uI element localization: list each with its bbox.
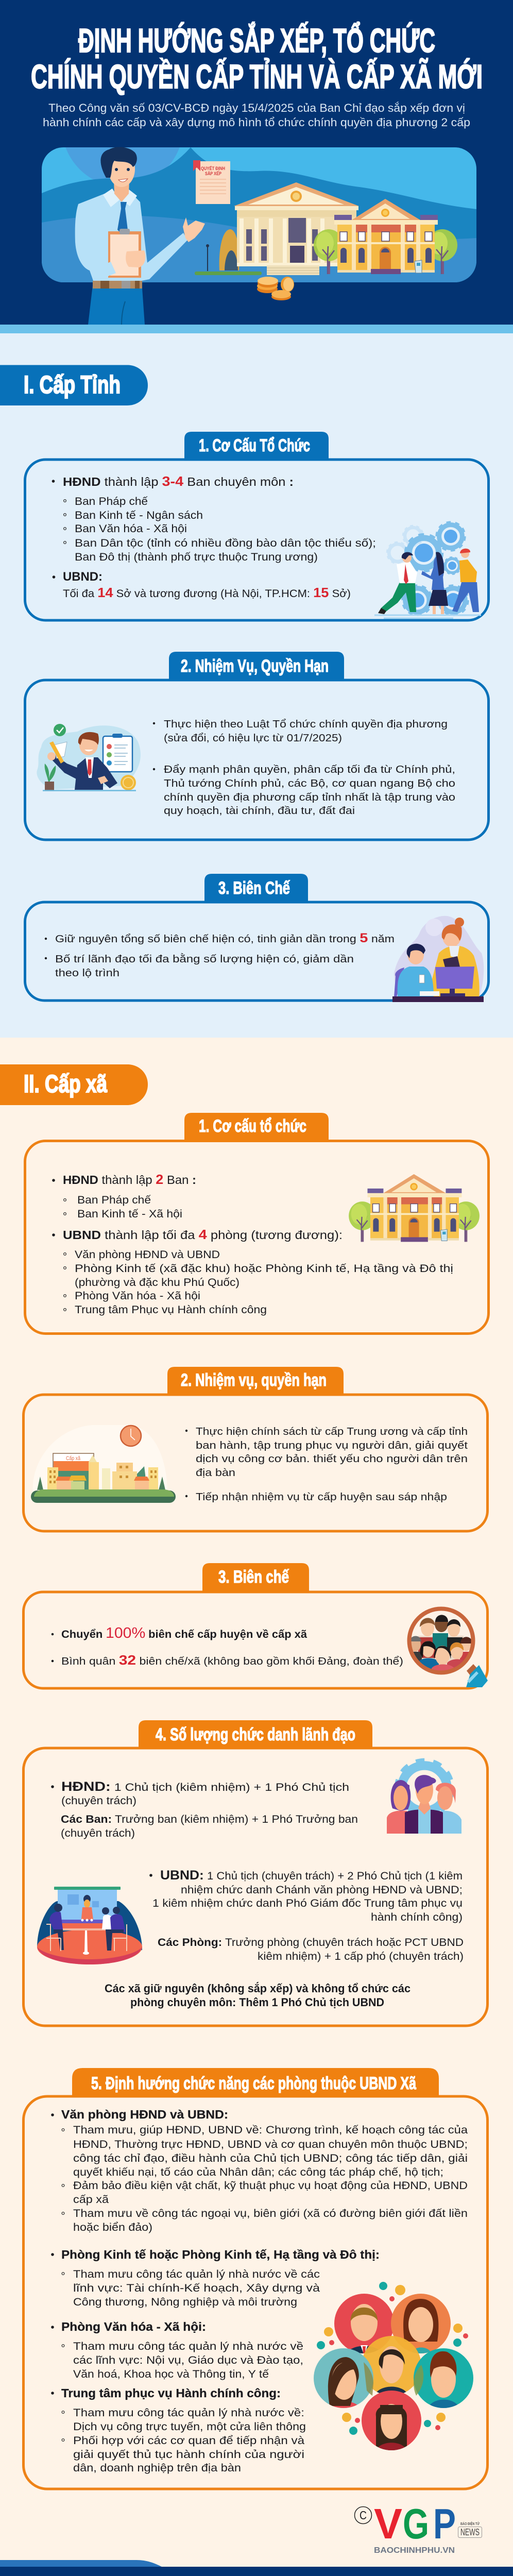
icon: man with clipboard bbox=[75, 147, 205, 325]
text block: chính quyền địa phương cấp tỉnh nhất là tập trung vào bbox=[164, 792, 455, 803]
text block: HĐND bbox=[51, 1780, 358, 1839]
text block: UBND: kiêm nhiệm) + 1 cấp phó (chuyên trách) bbox=[258, 1951, 464, 1962]
text block: (sửa đổi, có hiệu lực từ 01/7/2025) bbox=[164, 733, 342, 744]
text block: UBND: bbox=[63, 570, 102, 584]
tab heading: 3. Biên chế bbox=[218, 1567, 289, 1587]
text block: Đẩy mạnh phân quyền, phân cấp tối đa từ Chính phủ, bbox=[164, 764, 455, 775]
text block bbox=[185, 1426, 468, 1503]
icon: document: QUYẾT ĐỊNH bbox=[201, 166, 225, 171]
icon: people turning gears bbox=[374, 522, 481, 618]
text block: địa bàn bbox=[196, 1467, 235, 1479]
section heading: I. Cấp Tỉnh bbox=[0, 365, 148, 405]
text block: UBND: UBND: 1 Chủ tịch (chuyên trách) + 2 Phó Chủ tịch (1 kiêm bbox=[160, 1868, 463, 1883]
tab heading bbox=[184, 432, 329, 460]
text block: UBND: 1 kiêm nhiệm chức danh Phó Giám đốc Trung tâm phục vụ bbox=[152, 1897, 463, 1909]
panel: 5. Định hướng chức năng các phòng thuộc UBND Xã bbox=[24, 2068, 487, 2489]
text block: UBND bbox=[149, 1868, 464, 1962]
subtitle: hành chính các cấp và xây dựng mô hình tổ chức chính quyền địa phương 2 cấp bbox=[43, 116, 470, 129]
logo: VGP News: P bbox=[433, 2500, 456, 2548]
text block: Văn phòng HĐND và UBND: HĐND, Thường trực HĐND, UBND và cơ quan chuyên môn thuộc UBND; bbox=[73, 2139, 468, 2150]
text block: Tiếp nhận nhiệm vụ từ cấp huyện sau sáp nhập bbox=[196, 1492, 447, 1503]
text block: (phường và đặc khu Phú Quốc) bbox=[75, 1277, 240, 1289]
text block bbox=[52, 1625, 403, 1668]
text block: HĐND: Các Ban: Trưởng ban (kiêm nhiệm) + 1 Phó Trưởng ban bbox=[61, 1814, 358, 1825]
icon: two office workers at a computer bbox=[392, 916, 484, 1002]
text block: Phòng Kinh tế: Tham mưu công tác quản lý nhà nước về các bbox=[73, 2268, 320, 2280]
text block: Thủ tướng Chính phủ, các Bộ, cơ quan ngang Bộ cho bbox=[164, 778, 455, 789]
text block: Trung tâm Phục vụ Hành chính công bbox=[75, 1304, 267, 1316]
text block: Ban Kinh tế - Xã hội bbox=[77, 1208, 182, 1220]
text block: UBND: hành chính công) bbox=[371, 1911, 463, 1923]
logo: VGP News: NEWS bbox=[460, 2527, 480, 2537]
text block: HĐND: HĐND: 1 Chủ tịch (kiêm nhiệm) + 1 Phó Chủ tịch bbox=[61, 1780, 349, 1794]
text block: Thực hiện chính sách từ cấp Trung ương và cấp tỉnh bbox=[196, 1426, 468, 1437]
text block: Trung tâm phục vụ Hành chính công: giải quyết thủ tục hành chính của người bbox=[73, 2449, 304, 2461]
title bbox=[31, 22, 483, 95]
icon: circles of people bbox=[314, 2282, 473, 2452]
text block: Trung tâm phục vụ Hành chính công bbox=[51, 2386, 306, 2474]
text block: Văn phòng HĐND và UBND bbox=[75, 1249, 220, 1261]
panel: 3. Biên chế (tỉnh) bbox=[25, 874, 488, 1002]
icon: document bbox=[193, 160, 230, 204]
logo: VGP News: BAOCHINHPHU.VN bbox=[374, 2546, 455, 2555]
icon: building with trees bbox=[349, 1174, 480, 1242]
logo: VGP News: BÁO ĐIỆN TỬ bbox=[460, 2521, 480, 2526]
tab heading bbox=[184, 1113, 329, 1142]
text block: Văn phòng HĐND và UBND: công tác chỉ đạo, điều hành của Chủ tịch UBND; công tác tiếp dân, giải bbox=[73, 2153, 468, 2164]
icon: large building bbox=[195, 182, 359, 275]
text block: Ban Văn hóa - Xã hội bbox=[75, 523, 187, 535]
text block: Văn phòng HĐND và UBND: Văn phòng HĐND và UBND: bbox=[61, 2108, 228, 2121]
panel: 4. Số lượng chức danh lãnh đạo bbox=[24, 1720, 487, 2026]
text block: Phòng Kinh tế (xã đặc khu) hoặc Phòng Kinh tế, Hạ tầng và Đô thị bbox=[75, 1263, 453, 1275]
text block: note: Các xã giữ nguyên (không sắp xếp) và không tổ chức các bbox=[105, 1982, 411, 1995]
icon: document: SẮP XẾP bbox=[205, 171, 221, 176]
icon: town illustration: Cấp xã bbox=[66, 1455, 81, 1462]
text block: Chuyển 100% biên chế cấp huyện về cấp xã bbox=[61, 1625, 307, 1641]
text block: Trung tâm phục vụ Hành chính công: dân, doanh nghiệp trên địa bàn bbox=[73, 2462, 241, 2474]
text block: note bbox=[105, 1982, 411, 2009]
text block: Phòng Văn hóa - Xã hội: Văn hoá, Khoa học và Thông tin, Y tế bbox=[73, 2368, 269, 2380]
text block: Trung tâm phục vụ Hành chính công: Dịch vụ công trực tuyến, một cửa liên thông bbox=[73, 2421, 306, 2433]
icon: magnifier over people bbox=[409, 1608, 488, 1687]
tab heading bbox=[204, 874, 308, 902]
text block: Phòng Văn hóa - Xã hội: các lĩnh vực: Nội vụ, Giáo dục và Đào tạo, bbox=[73, 2354, 303, 2366]
text block: Ban Pháp chế bbox=[75, 496, 148, 507]
logo: VGP News: V bbox=[374, 2500, 402, 2548]
text block: Phòng Văn hóa - Xã hội: Tham mưu công tác quản lý nhà nước về bbox=[73, 2341, 303, 2352]
text block: Thực hiện theo Luật Tổ chức chính quyền địa phương bbox=[164, 719, 448, 730]
text block: dịch vụ công cơ bản. thiết yếu cho người dân trên bbox=[196, 1453, 468, 1465]
text block: Phòng Kinh tế: Công thương, Nông nghiệp và môi trường bbox=[73, 2296, 297, 2308]
section heading: II. Cấp xã: II. Cấp xã bbox=[24, 1071, 107, 1098]
logo: VGP News bbox=[354, 2500, 482, 2555]
text block: Văn phòng HĐND và UBND: quyết khiếu nại, tố cáo của Nhân dân; các công tác pháp chế, hộ tịch; bbox=[73, 2166, 443, 2178]
tab heading: 1. Cơ Cấu Tổ Chức bbox=[199, 436, 310, 455]
text block bbox=[52, 473, 376, 600]
text block: Ban Đô thị (thành phố trực thuộc Trung ương) bbox=[75, 551, 318, 563]
panel: 1. Cơ cấu tổ chức (tỉnh) bbox=[25, 432, 488, 620]
icon: coins bbox=[257, 277, 294, 300]
text block: Phòng Kinh tế bbox=[51, 2248, 380, 2308]
text block: Phòng Văn hóa - Xã hội bbox=[51, 2320, 303, 2380]
text block: HĐND thành lập 3-4 Ban chuyên môn : bbox=[63, 473, 294, 489]
subtitle bbox=[43, 101, 470, 129]
text block: Văn phòng HĐND và UBND: cấp xã bbox=[73, 2194, 109, 2206]
text block: UBND: Các Phòng: Trưởng phòng (chuyên trách hoặc PCT UBND bbox=[158, 1937, 464, 1948]
subtitle: Theo Công văn số 03/CV-BCĐ ngày 15/4/2025 của Ban Chỉ đạo sắp xếp đơn vị bbox=[48, 101, 465, 114]
text block: Phòng Văn hóa - Xã hội: Phòng Văn hóa - Xã hội: bbox=[61, 2320, 206, 2333]
section heading: I. Cấp Tỉnh: I. Cấp Tỉnh bbox=[24, 371, 121, 399]
text block: Bố trí lãnh đạo tối đa bằng số lượng hiện có, giảm dần bbox=[55, 953, 354, 965]
text block: Trung tâm phục vụ Hành chính công: Phối hợp với các cơ quan để tiếp nhận và bbox=[73, 2435, 304, 2447]
text block bbox=[153, 719, 455, 817]
text block: Trung tâm phục vụ Hành chính công: Tham mưu công tác quản lý nhà nước về: bbox=[73, 2407, 304, 2419]
text block: HĐND: (chuyên trách) bbox=[61, 1795, 136, 1807]
text block: Trung tâm phục vụ Hành chính công: Trung tâm phục vụ Hành chính công: bbox=[61, 2386, 281, 2400]
tab heading bbox=[167, 1367, 344, 1395]
text block: Ban Kinh tế - Ngân sách bbox=[75, 510, 203, 521]
tab heading bbox=[72, 2068, 439, 2097]
panel: 1. Cơ cấu tổ chức (xã) bbox=[25, 1113, 488, 1333]
text block bbox=[45, 931, 395, 979]
section heading: II. Cấp xã bbox=[0, 1064, 148, 1105]
text block: Phòng Kinh tế: lĩnh vực: Tài chính-Kế hoạch, Xây dựng và bbox=[73, 2282, 320, 2294]
icon: small building with trees bbox=[314, 199, 457, 274]
text block: Phòng Văn hóa - Xã hội bbox=[75, 1290, 200, 1302]
text block bbox=[52, 1172, 453, 1316]
tab heading: 2. Nhiệm vụ, quyền hạn bbox=[181, 1370, 327, 1390]
text block: Văn phòng HĐND và UBND: Tham mưu, giúp HĐND, UBND về: Chương trình, kế hoạch công tác của bbox=[73, 2124, 468, 2136]
text block: Tối đa 14 Sở và tương đương (Hà Nội, TP.HCM: 15 Sở) bbox=[63, 585, 351, 600]
text block: HĐND: (chuyên trách) bbox=[61, 1827, 135, 1839]
text block: UBND: nhiệm chức danh Chánh văn phòng HĐND và UBND; bbox=[181, 1884, 463, 1896]
text block: quy hoạch, tài chính, đầu tư, đất đai bbox=[164, 805, 355, 817]
text block: note: phòng chuyên môn: Thêm 1 Phó Chủ tịch UBND bbox=[130, 1996, 384, 2009]
panel: 2. Nhiệm vụ, quyền hạn (tỉnh) bbox=[25, 652, 488, 840]
text block: Văn phòng HĐND và UBND: Tham mưu về công tác ngoại vụ, biên giới (xã có đường biên giới đất liền bbox=[73, 2208, 468, 2219]
logo: VGP News: G bbox=[403, 2500, 429, 2548]
icon: meeting room bbox=[37, 1887, 142, 1964]
text block: Văn phòng HĐND và UBND: hoặc biển đảo) bbox=[73, 2222, 152, 2233]
hero illustration bbox=[42, 147, 476, 325]
tab heading bbox=[169, 652, 344, 680]
tab heading: 2. Nhiệm Vụ, Quyền Hạn bbox=[181, 656, 329, 676]
panel: 2. Nhiệm vụ, quyền hạn (xã) bbox=[24, 1367, 487, 1531]
text block: Văn phòng HĐND và UBND: Đảm bảo điều kiện vật chất, kỹ thuật phục vụ hoạt động của HĐND, UBND bbox=[73, 2180, 468, 2192]
text block: theo lộ trình bbox=[55, 968, 119, 979]
tab heading: 4. Số lượng chức danh lãnh đạo bbox=[156, 1725, 355, 1744]
tab heading bbox=[202, 1563, 309, 1592]
text block: Ban Pháp chế bbox=[77, 1194, 151, 1206]
panel: 3. Biên chế (xã) bbox=[24, 1563, 488, 1688]
text block: Văn phòng HĐND và UBND bbox=[51, 2108, 468, 2233]
text block: UBND thành lập tối đa 4 phòng (tương đương): bbox=[63, 1227, 343, 1242]
text block: Ban Dân tộc (tỉnh có nhiều đồng bào dân tộc thiểu số); bbox=[75, 537, 376, 549]
tab heading bbox=[139, 1720, 372, 1749]
icon: town illustration bbox=[31, 1425, 176, 1503]
tab heading: 1. Cơ cấu tổ chức bbox=[199, 1116, 306, 1136]
text block: Bình quân 32 biên chế/xã (không bao gồm khối Đảng, đoàn thể) bbox=[61, 1652, 403, 1668]
icon: team with gear bbox=[387, 1761, 461, 1834]
icon: businessman with checklist bbox=[37, 724, 141, 790]
text block: ban hành, tập trung phục vụ người dân, giải quyết bbox=[196, 1440, 468, 1451]
text block: HĐND thành lập 2 Ban : bbox=[63, 1172, 196, 1187]
logo: VGP News: C bbox=[360, 2509, 367, 2522]
text block: Giữ nguyên tổng số biên chế hiện có, tinh giản dần trong 5 năm bbox=[55, 931, 395, 945]
footer band bbox=[0, 2560, 513, 2576]
text block: Phòng Kinh tế: Phòng Kinh tế hoặc Phòng Kinh tế, Hạ tầng và Đô thị: bbox=[61, 2248, 380, 2261]
tab heading: 3. Biên Chế bbox=[218, 878, 290, 898]
